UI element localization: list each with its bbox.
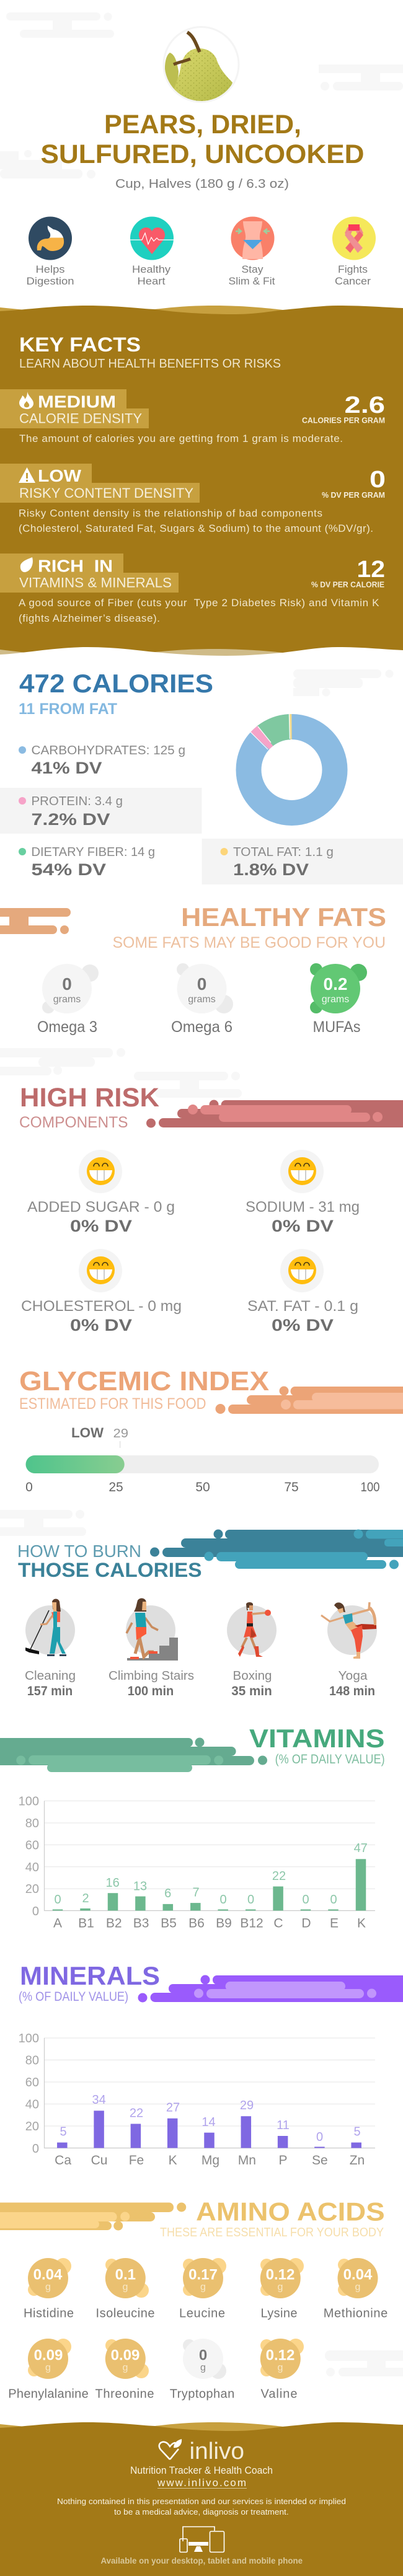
bar chart: minerals: Ca xyxy=(55,2153,71,2168)
subheading: from fat: 11 FROM FAT xyxy=(19,700,117,718)
legend: total fat xyxy=(202,839,403,884)
amino: valine: Valine xyxy=(260,2388,298,2401)
icon: smiley xyxy=(79,1249,122,1292)
heading: vitamins: VITAMINS xyxy=(249,1724,384,1753)
amino: phenylalanine: Phenylalanine xyxy=(8,2388,89,2401)
label: healthy heart xyxy=(132,263,171,287)
legend: protein: 7.2% DV xyxy=(31,810,110,829)
bar chart: vitamins: B9 xyxy=(216,1917,232,1930)
gauge scale: 50 xyxy=(195,1480,210,1494)
pear photo xyxy=(164,27,239,103)
legend: carbohydrates: 41% DV xyxy=(31,759,102,777)
description xyxy=(19,597,379,624)
panel: healthy fats xyxy=(0,902,386,1036)
heading: key facts: KEY FACTS xyxy=(19,333,141,356)
bar chart: minerals: 27 xyxy=(166,2101,180,2115)
label: cleaning 157 min: Cleaning xyxy=(25,1669,76,1683)
icon: leaf xyxy=(20,557,33,572)
icon: digestion xyxy=(29,217,72,260)
amino: lysine: g xyxy=(278,2282,283,2293)
bar chart: vitamins: B12 xyxy=(240,1917,264,1930)
bar chart: vitamins: A xyxy=(53,1917,62,1930)
legend: total fat: 1.8% DV xyxy=(233,860,309,879)
subheading: THESE ARE ESSENTIAL FOR YOUR BODY xyxy=(160,2226,384,2239)
stat: omega 3: Omega 3 xyxy=(37,1018,97,1036)
label: fights cancer: Fights xyxy=(338,263,368,275)
description: The amount of calories you are getting from 1 gram is moderate. xyxy=(19,433,343,444)
label: cleaning 157 min xyxy=(25,1669,76,1698)
bar chart: vitamins: 47 xyxy=(354,1842,368,1855)
amino: isoleucine: g xyxy=(123,2282,128,2293)
amino: threonine: Threonine xyxy=(95,2388,154,2401)
panel: key facts xyxy=(0,306,403,663)
activity: boxing xyxy=(227,1602,277,1657)
label: climbing stairs 100 min xyxy=(108,1669,194,1698)
amino: methionine xyxy=(324,2258,388,2321)
amino: leucine xyxy=(179,2258,226,2321)
bar chart: vitamins: B3 xyxy=(133,1917,149,1930)
website: www.inlivo.com xyxy=(157,2477,246,2489)
amino: methionine: 0.04 xyxy=(343,2266,373,2283)
bar chart: vitamins: B5 xyxy=(161,1917,177,1930)
bar chart: minerals: Fe xyxy=(129,2153,144,2168)
label: risky content density: RISKY CONTENT DENSITY xyxy=(19,485,193,501)
amino: lysine: Lysine xyxy=(260,2307,298,2321)
subheading: components: COMPONENTS xyxy=(19,1114,128,1131)
bar chart: vitamins xyxy=(19,1795,375,1930)
gauge: low 29: LOW xyxy=(71,1425,104,1440)
bar chart: vitamins: 13 xyxy=(133,1879,147,1893)
label: stay slim and fit: Slim & Fit xyxy=(228,275,275,287)
gauge scale: 25 xyxy=(108,1480,123,1494)
value: 12: 12 xyxy=(357,557,385,583)
label: boxing 35 min: Boxing xyxy=(233,1669,272,1683)
description: Risky Content density is the relationship of bad components xyxy=(19,507,322,519)
fact: rich in vitamins xyxy=(0,554,385,624)
value: 0% DV xyxy=(272,1217,334,1235)
description: A good source of Fiber (cuts your Type 2 Diabetes Risk) and Vitamin K xyxy=(19,597,379,609)
bar chart: vitamins: 0 xyxy=(302,1893,309,1907)
heading: 472 calories: 472 CALORIES xyxy=(19,669,213,698)
amino: threonine xyxy=(95,2339,154,2401)
bar chart: vitamins: 0 xyxy=(247,1893,254,1907)
bar chart: vitamins: 16 xyxy=(105,1876,120,1890)
subheading: (% OF DAILY VALUE) xyxy=(19,1990,128,2004)
stat: omega 6: Omega 6 xyxy=(171,1018,232,1036)
bar chart: minerals: 60 xyxy=(25,2076,39,2089)
stat: omega 6: 0 xyxy=(197,974,206,994)
label: helps digestion: Digestion xyxy=(26,275,74,287)
activity: climbing stairs xyxy=(126,1599,178,1661)
subheading: LEARN ABOUT HEALTH BENEFITS OR RISKS xyxy=(19,357,281,371)
disclaimer xyxy=(57,2497,346,2516)
bar chart: vitamins: 0 xyxy=(54,1893,61,1907)
icon: smiley xyxy=(79,1150,122,1193)
bar chart: vitamins: 20 xyxy=(25,1882,39,1896)
label: helps digestion xyxy=(26,263,74,287)
icon: smiley xyxy=(280,1150,324,1193)
label: healthy heart: Heart xyxy=(138,275,166,287)
background clouds: top xyxy=(0,12,403,179)
item: sodium xyxy=(246,1150,360,1235)
heading: high risk: HIGH RISK xyxy=(20,1083,159,1113)
label: cleaning 157 min: 157 min xyxy=(27,1684,73,1698)
value: 0: 0 xyxy=(370,467,386,493)
bar chart: minerals: K xyxy=(169,2153,177,2168)
label: boxing 35 min: 35 min xyxy=(231,1684,272,1698)
amino: valine: g xyxy=(278,2363,283,2373)
donut chart xyxy=(249,714,335,813)
bar chart: vitamins: 60 xyxy=(25,1838,39,1852)
stat: omega 3 xyxy=(37,964,99,1036)
amino: isoleucine: 0.1 xyxy=(115,2266,136,2283)
stat: omega 3: grams xyxy=(53,994,81,1005)
fact: risky content density xyxy=(0,464,386,534)
bar chart: vitamins: 40 xyxy=(25,1861,39,1874)
fact: calorie density xyxy=(0,389,385,444)
label: boxing 35 min xyxy=(231,1669,272,1698)
legend: protein: PROTEIN: 3.4 g xyxy=(31,795,123,808)
item: cholesterol xyxy=(21,1249,182,1334)
amino: threonine: g xyxy=(123,2363,128,2373)
panel: vitamins xyxy=(0,1724,385,1930)
icon: fights cancer xyxy=(332,217,376,260)
panel: amino acids xyxy=(0,2197,403,2401)
label: ADDED SUGAR - 0 g xyxy=(27,1199,175,1215)
heading: minerals: MINERALS xyxy=(20,1961,160,1990)
unit: % DV PER GRAM xyxy=(322,490,385,500)
bar chart: vitamins: 7 xyxy=(192,1886,200,1899)
label: SAT. FAT - 0.1 g xyxy=(247,1298,358,1315)
gauge scale xyxy=(25,1480,379,1494)
gauge scale: 0 xyxy=(25,1480,33,1494)
bar chart: vitamins: 6 xyxy=(164,1887,171,1900)
stat: omega 6: grams xyxy=(188,994,216,1005)
bar chart: minerals: 100 xyxy=(19,2032,39,2045)
icon: slim and fit xyxy=(231,217,274,260)
logo: inlivo: inlivo xyxy=(190,2438,244,2464)
bar chart: minerals: 5 xyxy=(60,2125,67,2138)
icon: devices xyxy=(180,2526,224,2552)
gauge: low 29 xyxy=(26,1425,379,1473)
title: SULFURED, UNCOOKED xyxy=(41,139,365,169)
bar chart: vitamins: E xyxy=(330,1917,339,1930)
icon: smiley xyxy=(280,1249,324,1292)
stat: omega 6 xyxy=(171,963,233,1036)
panel: how to burn those calories xyxy=(0,1510,403,1698)
amino: histidine: Histidine xyxy=(24,2307,74,2321)
amino: lysine: 0.12 xyxy=(266,2266,294,2283)
bar chart: minerals: 11 xyxy=(277,2119,290,2132)
amino: methionine: g xyxy=(355,2282,360,2293)
value: 0% DV xyxy=(70,1217,132,1235)
stat: mufas: 0.2 xyxy=(324,974,347,994)
gauge scale: 75 xyxy=(284,1480,299,1494)
amino: tryptophan xyxy=(170,2339,234,2401)
bar chart: minerals: 14 xyxy=(202,2115,216,2129)
subheading: SOME FATS MAY BE GOOD FOR YOU xyxy=(113,934,386,951)
bar chart: minerals: 0 xyxy=(316,2130,323,2144)
amino: histidine xyxy=(24,2258,74,2321)
bar chart: minerals: 34 xyxy=(92,2093,106,2107)
amino: phenylalanine: g xyxy=(45,2363,51,2373)
stat: omega 3: 0 xyxy=(62,974,72,994)
amino: valine: 0.12 xyxy=(266,2347,294,2364)
gauge: low 29: 29 xyxy=(113,1427,128,1440)
unit: % DV PER CALORIE xyxy=(311,580,384,589)
bar chart: minerals: 5 xyxy=(353,2125,361,2138)
label: yoga 148 min: 148 min xyxy=(329,1684,375,1698)
legend: dietary fiber: 54% DV xyxy=(31,860,106,879)
bar chart: vitamins: 0 xyxy=(330,1893,337,1907)
amino: tryptophan: Tryptophan xyxy=(170,2388,234,2401)
legend: carbohydrates: CARBOHYDRATES: 125 g xyxy=(31,744,185,757)
bar chart: minerals xyxy=(19,2032,375,2168)
label: SODIUM - 31 mg xyxy=(246,1199,360,1215)
disclaimer: Nothing contained in this presentation and our services is intended or implied xyxy=(57,2497,346,2506)
amino: leucine: 0.17 xyxy=(188,2266,218,2283)
heading: how to burn: HOW TO BURN xyxy=(17,1542,141,1561)
bar chart: vitamins: 22 xyxy=(272,1869,286,1883)
bar chart: minerals: 80 xyxy=(25,2054,39,2068)
bar chart: vitamins: K xyxy=(357,1917,366,1930)
subheading: ESTIMATED FOR THIS FOOD xyxy=(19,1395,206,1413)
panel: high risk components xyxy=(0,1048,403,1334)
subheading: (% OF DAILY VALUE) xyxy=(275,1752,385,1767)
label: helps digestion: Helps xyxy=(36,263,64,275)
bar chart: minerals: Se xyxy=(312,2153,328,2168)
footer xyxy=(0,2422,403,2576)
item: saturated fat xyxy=(247,1249,358,1334)
panel: minerals xyxy=(19,1961,403,2168)
bar chart: minerals: 0 xyxy=(32,2142,39,2156)
amino: histidine: g xyxy=(45,2282,51,2293)
bar chart: vitamins: 100 xyxy=(19,1795,39,1809)
bar chart: minerals: 20 xyxy=(25,2120,39,2133)
legend: total fat: TOTAL FAT: 1.1 g xyxy=(233,845,334,859)
amino: phenylalanine: 0.09 xyxy=(34,2347,63,2364)
label: yoga 148 min xyxy=(329,1669,375,1698)
bar chart: vitamins: C xyxy=(273,1917,283,1930)
heading: glycemic index: GLYCEMIC INDEX xyxy=(19,1366,269,1396)
label: fights cancer: Cancer xyxy=(335,275,371,287)
amino: isoleucine xyxy=(95,2258,155,2321)
label: stay slim and fit xyxy=(228,263,275,287)
heading: those calories: THOSE CALORIES xyxy=(18,1559,202,1581)
serving size: Cup, Halves (180 g / 6.3 oz) xyxy=(115,177,289,191)
activity: cleaning xyxy=(25,1599,75,1656)
icon: flame xyxy=(19,392,33,409)
bar chart: vitamins: D xyxy=(301,1917,311,1930)
bar chart: vitamins: 80 xyxy=(25,1817,39,1830)
label: medium: MEDIUM xyxy=(38,392,116,412)
legend: protein xyxy=(0,788,202,834)
gauge scale: 100 xyxy=(361,1480,379,1494)
bar chart: vitamins: B1 xyxy=(78,1917,94,1930)
unit: CALORIES PER GRAM xyxy=(302,415,385,425)
logo: inlivo xyxy=(159,2438,244,2464)
heading: healthy fats: HEALTHY FATS xyxy=(181,902,386,932)
icon: healthy heart xyxy=(130,217,174,260)
legend: dietary fiber xyxy=(19,845,155,879)
icon: warning triangle xyxy=(19,467,35,483)
bar chart: minerals: Mg xyxy=(202,2153,219,2168)
legend: carbohydrates xyxy=(19,744,185,777)
description xyxy=(19,507,373,534)
bar chart: minerals: P xyxy=(278,2153,288,2168)
bar chart: vitamins: B6 xyxy=(188,1917,205,1930)
bar chart: vitamins: 0 xyxy=(219,1893,227,1907)
amino: valine xyxy=(260,2339,304,2401)
label: low: LOW xyxy=(38,466,82,485)
bar chart: minerals: Cu xyxy=(91,2153,107,2168)
label: calorie density: CALORIE DENSITY xyxy=(19,410,142,426)
description: (Cholesterol, Saturated Fat, Sugars & Sodium) to the amount (%DV/gr). xyxy=(19,523,373,534)
bar chart: minerals: 22 xyxy=(130,2106,143,2120)
amino: leucine: g xyxy=(200,2282,206,2293)
amino: leucine: Leucine xyxy=(179,2307,225,2321)
amino: isoleucine: Isoleucine xyxy=(95,2307,155,2321)
amino: tryptophan: 0 xyxy=(199,2347,207,2364)
tagline: Nutrition Tracker & Health Coach xyxy=(130,2464,273,2476)
label: fights cancer xyxy=(335,263,371,287)
label: yoga 148 min: Yoga xyxy=(339,1669,368,1683)
item: added sugar xyxy=(27,1150,175,1235)
amino: lysine xyxy=(260,2258,304,2321)
bar chart: minerals: Mn xyxy=(238,2153,256,2168)
amino: methionine: Methionine xyxy=(324,2307,388,2321)
disclaimer: to be a medical advice, diagnosis or treatment. xyxy=(114,2507,289,2516)
description: (fights Alzheimer’s disease). xyxy=(19,612,160,624)
bar chart: minerals: 40 xyxy=(25,2097,39,2111)
amino: threonine: 0.09 xyxy=(111,2347,140,2364)
heading: amino acids: AMINO ACIDS xyxy=(196,2197,385,2226)
activity: yoga xyxy=(321,1602,377,1659)
label: rich in: RICH IN xyxy=(38,557,113,575)
bar chart: vitamins: B2 xyxy=(106,1917,122,1930)
value: 0% DV xyxy=(272,1316,334,1334)
bar chart: vitamins: 2 xyxy=(82,1892,89,1905)
label: vitamins and minerals: VITAMINS & MINERALS xyxy=(19,575,172,590)
panel: glycemic index xyxy=(19,1366,403,1494)
amino: histidine: 0.04 xyxy=(33,2266,63,2283)
benefits row xyxy=(26,217,376,287)
amino: phenylalanine xyxy=(8,2339,89,2401)
label: CHOLESTEROL - 0 mg xyxy=(21,1298,182,1315)
panel: calories xyxy=(0,669,403,884)
legend: dietary fiber: DIETARY FIBER: 14 g xyxy=(31,845,155,859)
bar chart: minerals: 29 xyxy=(240,2099,254,2112)
label: climbing stairs 100 min: Climbing Stairs xyxy=(108,1669,194,1683)
title xyxy=(41,110,365,169)
bar chart: minerals: Zn xyxy=(350,2153,365,2168)
availability note: Available on your desktop, tablet and mobile phone xyxy=(100,2556,303,2565)
stat: mufas: MUFAs xyxy=(312,1018,361,1036)
label: climbing stairs 100 min: 100 min xyxy=(128,1684,174,1698)
label: stay slim and fit: Stay xyxy=(242,263,264,275)
stat: mufas xyxy=(310,963,367,1036)
value: 0% DV xyxy=(70,1316,132,1334)
stat: mufas: grams xyxy=(322,994,349,1005)
title: PEARS, DRIED, xyxy=(104,110,301,139)
bar chart: vitamins: 0 xyxy=(32,1905,39,1918)
amino: tryptophan: g xyxy=(200,2363,206,2373)
label: healthy heart: Healthy xyxy=(132,263,171,275)
value: 2.6: 2.6 xyxy=(345,392,385,418)
